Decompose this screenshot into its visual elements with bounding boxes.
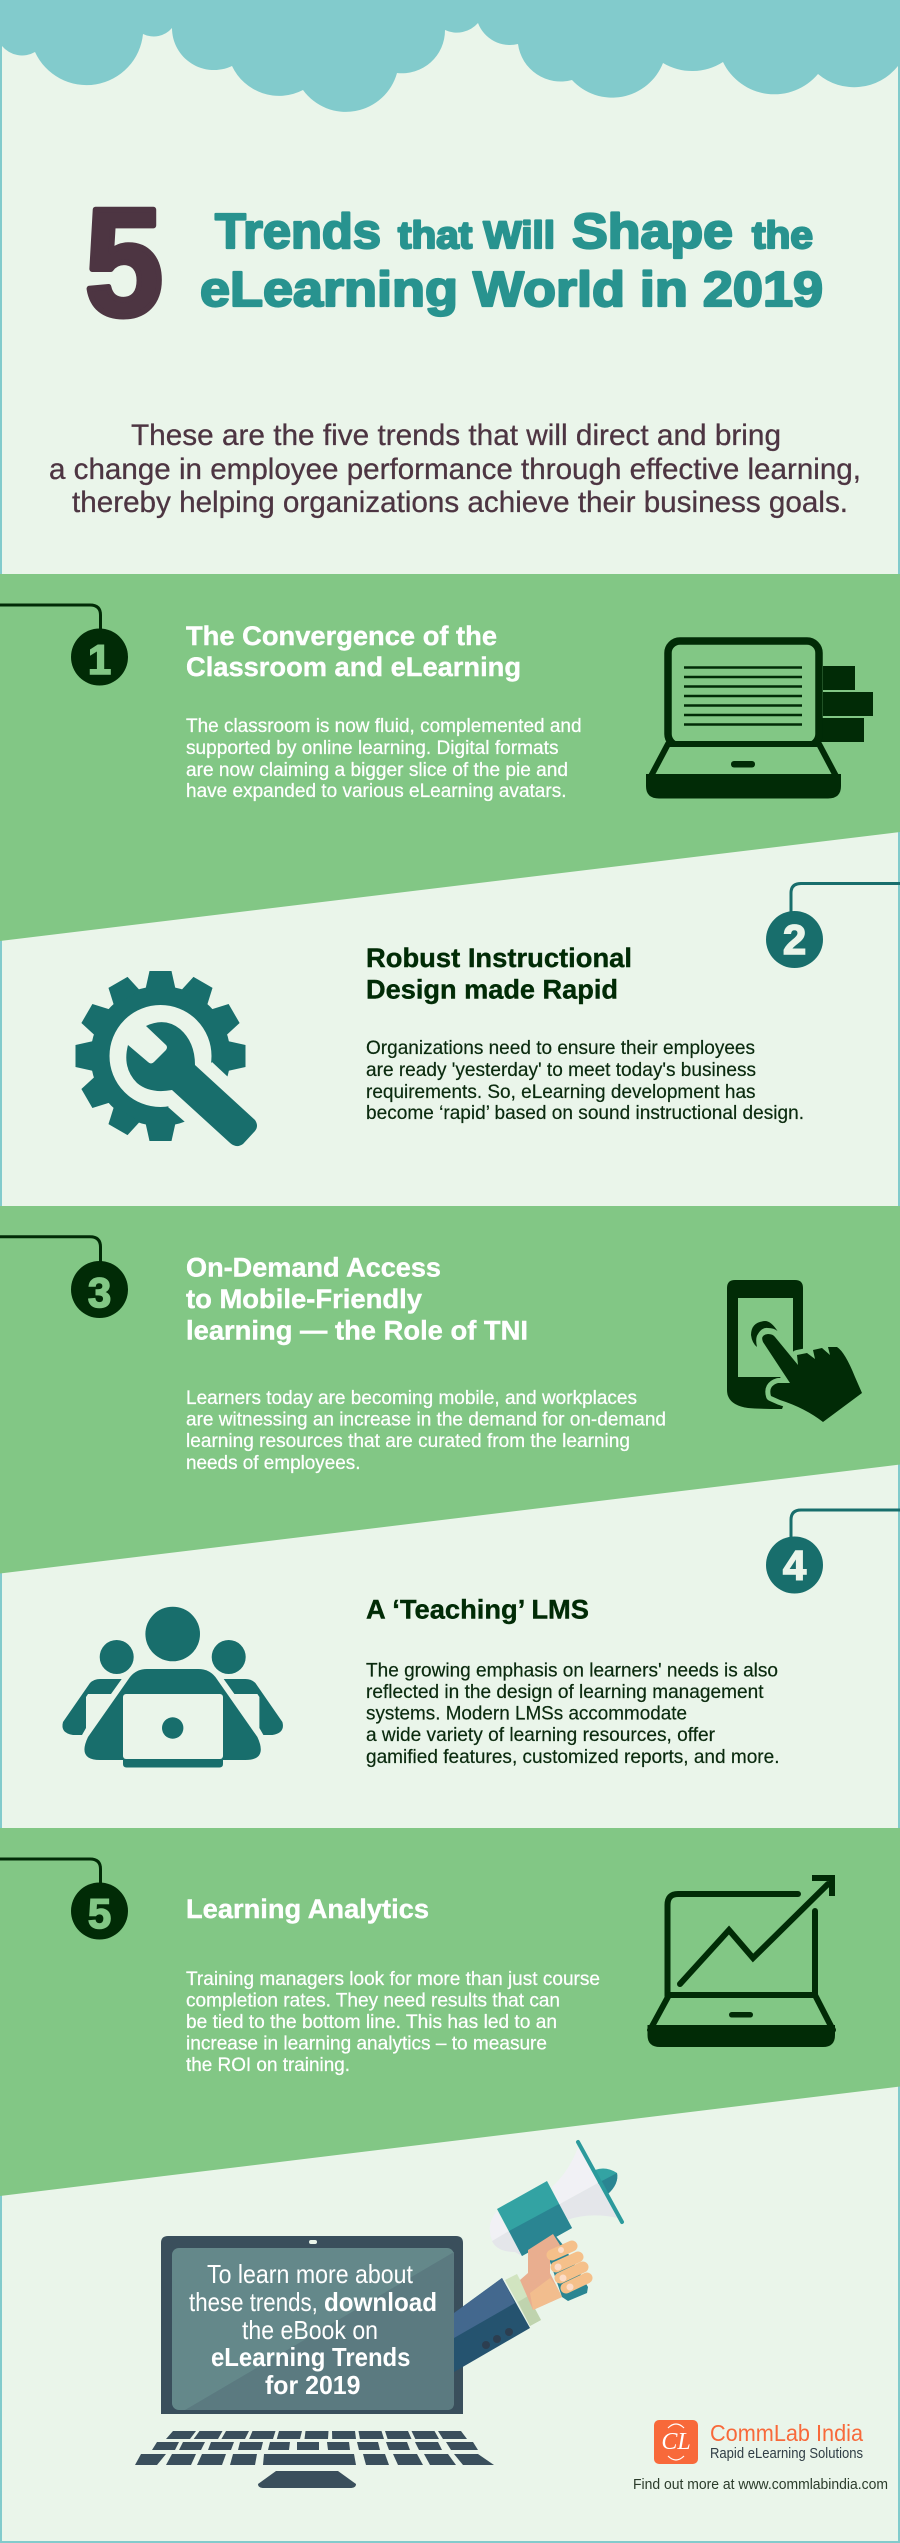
call to action text: the eBook on [242, 2315, 378, 2345]
icon: phone with pointing hand [727, 1280, 862, 1422]
trend 2 [76, 884, 900, 1165]
trend 5 [0, 1859, 835, 2076]
body 5: be tied to the bottom line. This has led to an [186, 2011, 557, 2033]
body 3: Learners today are becoming mobile, and workplaces [186, 1387, 637, 1409]
illustration: laptop call to action [135, 2240, 494, 2488]
call to action text [189, 2259, 437, 2400]
logo mark [654, 2420, 698, 2464]
big numeral 5: 5 [85, 177, 163, 348]
heading 5: Learning Analytics [186, 1894, 429, 1924]
sleeve [454, 2278, 530, 2372]
body 5: the ROI on training. [186, 2054, 350, 2076]
trend 1 [0, 605, 873, 802]
heading 3: to Mobile-Friendly [186, 1284, 422, 1314]
intro text: thereby helping organizations achieve their business goals. [72, 486, 848, 519]
body 4 [366, 1660, 780, 1768]
title line 1: Trends [215, 205, 381, 259]
number badge 4: 4 [783, 1542, 807, 1589]
connector 1 [0, 605, 100, 640]
body 1 [186, 715, 582, 802]
heading 2: Design made Rapid [366, 974, 618, 1004]
cuff [505, 2274, 541, 2326]
call to action text: To learn more about [207, 2259, 414, 2289]
heading 3 [186, 1253, 528, 1346]
body 5: increase in learning analytics – to measure [186, 2033, 547, 2055]
number badge 2 [766, 911, 823, 968]
icon: team around laptop [62, 1607, 283, 1768]
title line 1 [215, 205, 813, 259]
connector 4 [791, 1510, 900, 1545]
logo wordmark: Rapid eLearning Solutions [710, 2445, 863, 2462]
connector 5 [0, 1859, 100, 1894]
number badge 4 [766, 1536, 823, 1594]
title line 1: Shape [572, 205, 733, 259]
title line 1: the [752, 215, 813, 257]
illustration: laptop bezel [161, 2236, 463, 2414]
body 2: are ready 'yesterday' to meet today's business [366, 1059, 756, 1081]
panel: green band 5 [0, 1828, 900, 2196]
number badge 5 [71, 1882, 128, 1940]
body 5: completion rates. They need results that can [186, 1990, 560, 2012]
heading 1: The Convergence of the [186, 621, 497, 651]
body 1: supported by online learning. Digital formats [186, 737, 559, 759]
number badge 3 [71, 1261, 128, 1318]
body 1: are now claiming a bigger slice of the pie and [186, 759, 568, 781]
heading 3: learning — the Role of TNI [186, 1316, 528, 1346]
body 4: reflected in the design of learning management [366, 1681, 764, 1703]
title line 1: that Will [398, 215, 555, 257]
call to action text: for 2019 [265, 2370, 360, 2400]
trend 3 [0, 1237, 862, 1474]
heading 1 [186, 621, 521, 682]
body 5: Training managers look for more than just course [186, 1968, 600, 1990]
body 4: The growing emphasis on learners' needs is also [366, 1660, 778, 1682]
call to action text: these trends, download [189, 2287, 437, 2317]
body 2: Organizations need to ensure their employees [366, 1037, 755, 1059]
logo: CommLab India [654, 2420, 863, 2464]
icon: laptop with growth arrow [648, 1875, 835, 2047]
intro text: a change in employee performance through effective learning, [49, 453, 861, 486]
body 2 [366, 1037, 804, 1124]
intro text [49, 419, 861, 519]
body 2: requirements. So, eLearning development has [366, 1081, 756, 1103]
trend 4 [62, 1510, 900, 1768]
logo mark: CL [661, 2429, 691, 2455]
heading 1: Classroom and eLearning [186, 652, 521, 682]
body 3: needs of employees. [186, 1452, 360, 1474]
logo wordmark: CommLab India [710, 2420, 863, 2446]
body 4: systems. Modern LMSs accommodate [366, 1703, 687, 1725]
number badge 2: 2 [783, 916, 806, 963]
body 4: a wide variety of learning resources, offer [366, 1724, 715, 1746]
body 3: learning resources that are curated from the learning [186, 1430, 630, 1452]
number badge 5: 5 [88, 1890, 111, 1937]
keyboard [135, 2431, 494, 2465]
body 3: are witnessing an increase in the demand for on-demand [186, 1409, 666, 1431]
heading 4: A ‘Teaching’ LMS [366, 1594, 589, 1624]
call to action text: eLearning Trends [211, 2342, 410, 2372]
footer link text: Find out more at www.commlabindia.com [633, 2476, 888, 2493]
panel: green band 3 [0, 1206, 900, 1574]
title line 2: eLearning World in 2019 [200, 263, 823, 317]
laptop foot [258, 2471, 356, 2488]
title [85, 177, 823, 348]
body 1: The classroom is now fluid, complemented and [186, 715, 582, 737]
number badge 1: 1 [88, 636, 111, 683]
icon: gear and wrench [76, 971, 270, 1165]
body 1: have expanded to various eLearning avatars. [186, 780, 566, 802]
number badge 1 [71, 628, 128, 686]
heading 2: Robust Instructional [366, 943, 632, 973]
icon: laptop with document [646, 641, 873, 798]
heading 3: On-Demand Access [186, 1253, 441, 1283]
body 2: become ‘rapid’ based on sound instructional design. [366, 1102, 804, 1124]
body 3 [186, 1387, 666, 1474]
hand [520, 2234, 587, 2310]
body 5 [186, 1968, 600, 2076]
heading 2 [366, 943, 632, 1004]
megaphone [490, 2142, 622, 2301]
logo wordmark [710, 2420, 863, 2462]
illustration: megaphone and arm [454, 2142, 622, 2372]
panel: green band 1 [0, 574, 900, 941]
connector 3 [0, 1237, 100, 1272]
body 4: gamified features, customized reports, and more. [366, 1746, 780, 1768]
number badge 3: 3 [88, 1269, 111, 1316]
laptop screen [172, 2240, 454, 2410]
intro text: These are the five trends that will direct and bring [131, 419, 781, 452]
connector 2 [791, 884, 900, 920]
clouds [0, 0, 900, 112]
